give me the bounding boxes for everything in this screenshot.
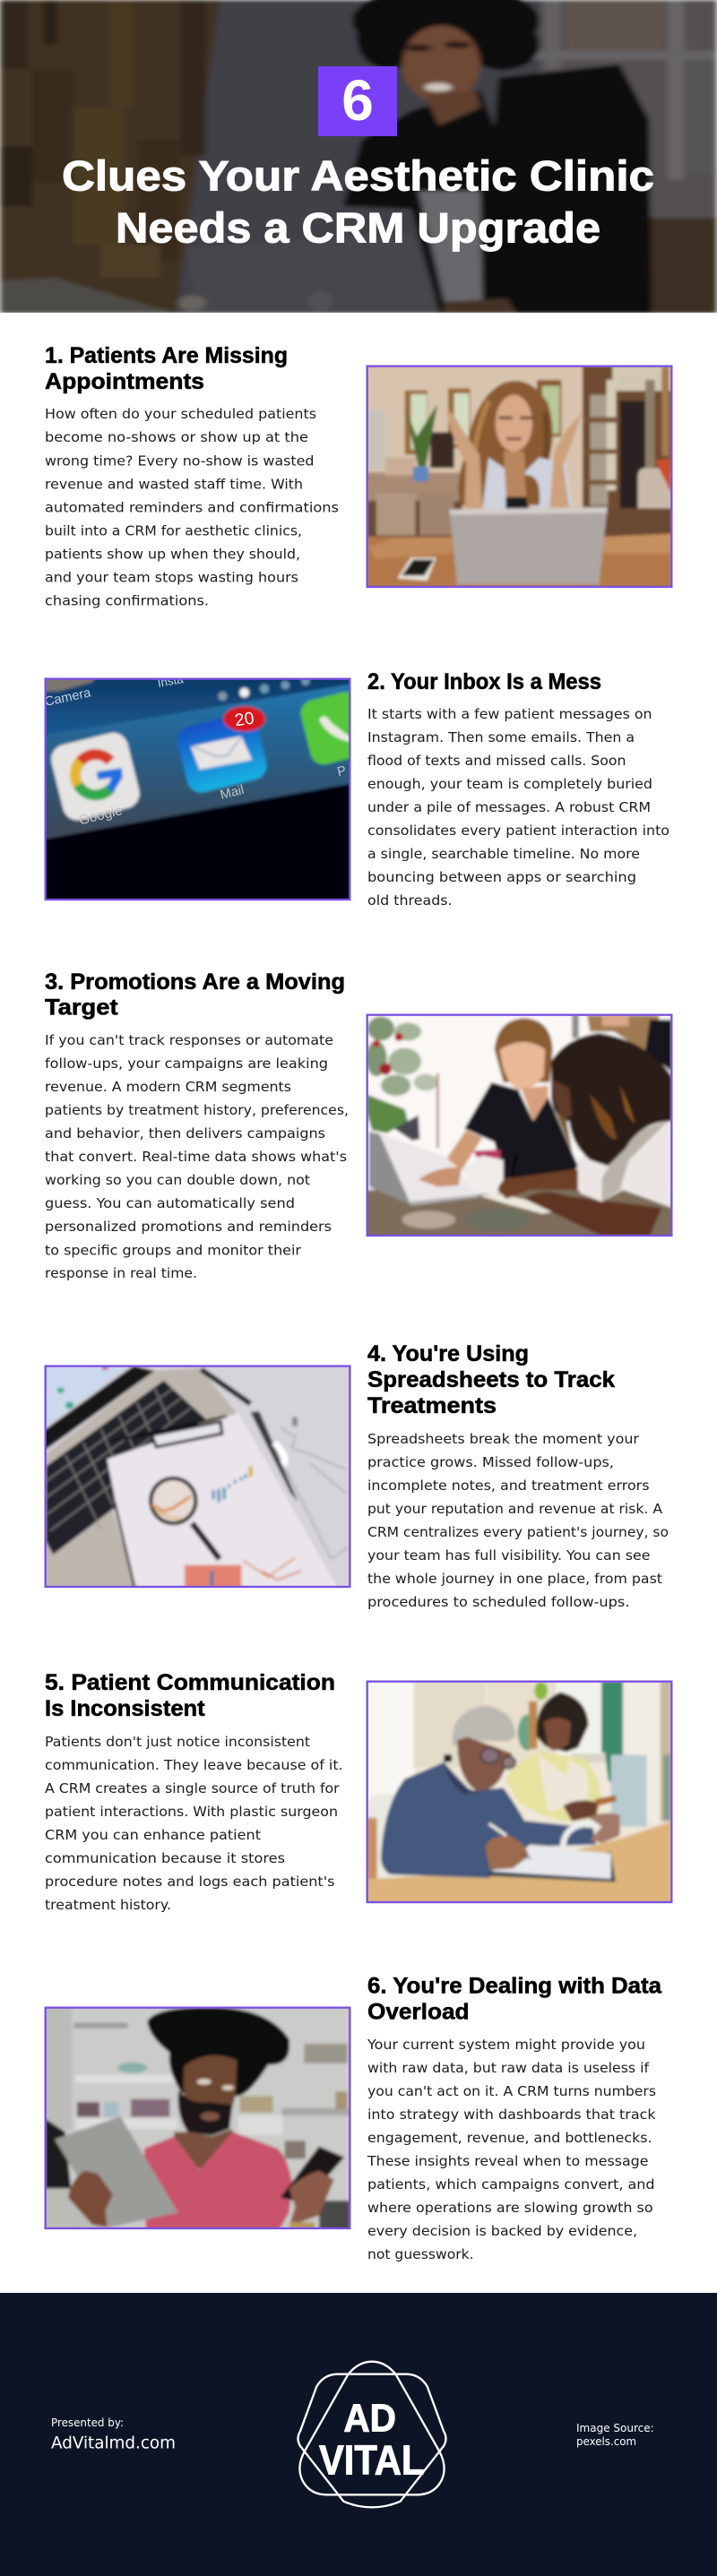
- text block: clue 6: every decision is backed by evidence,: [367, 2223, 637, 2239]
- text block: clue 2: Instagram. Then some emails. Then a: [367, 729, 635, 745]
- logo: AD VITAL: AD: [343, 2396, 396, 2440]
- presented by: AdVitalmd.com: [51, 2434, 176, 2453]
- text block: clue 2: It starts with a few patient messages on: [367, 706, 652, 722]
- text block: clue 5: procedure notes and logs each patient's: [45, 1874, 335, 1890]
- heading: clue 6: Overload: [367, 2000, 470, 2025]
- photo: older man signing paperwork with assistant: [363, 1677, 677, 1908]
- heading: clue 3: [45, 969, 345, 1020]
- text block: clue 2: under a pile of messages. A robust CRM: [367, 799, 651, 815]
- text block: clue 4: incomplete notes, and treatment errors: [367, 1478, 649, 1494]
- text block: clue 3: patients by treatment history, preferences,: [45, 1102, 349, 1118]
- text block: clue 2: bouncing between apps or searching: [367, 869, 636, 885]
- text block: clue 3: that convert. Real-time data shows what's: [45, 1149, 347, 1165]
- background photo: woman at laptop: [0, 0, 717, 314]
- photo: man juggling tablet and phone: [41, 2003, 355, 2234]
- text block: clue 5: treatment history.: [45, 1897, 171, 1913]
- text block: clue 3: [45, 1032, 349, 1281]
- text block: clue 1: How often do your scheduled patients: [45, 406, 316, 422]
- text block: clue 1: and your team stops wasting hours: [45, 570, 298, 586]
- text block: clue 5: [45, 1734, 343, 1913]
- text block: clue 4: [367, 1431, 669, 1610]
- heading: clue 4: Treatments: [367, 1393, 497, 1418]
- text block: clue 6: you can't act on it. A CRM turns numbers: [367, 2083, 656, 2099]
- title: [62, 152, 654, 251]
- text block: clue 1: become no-shows or show up at the: [45, 429, 308, 445]
- text block: clue 3: revenue. A modern CRM segments: [45, 1079, 291, 1095]
- photo: phone mail icon with notification badge: P: [336, 763, 348, 780]
- panel: clue 2: [41, 669, 669, 909]
- text block: clue 1: automated reminders and confirmations: [45, 500, 339, 516]
- text block: clue 3: guess. You can automatically send: [45, 1195, 295, 1211]
- text block: clue 3: to specific groups and monitor their: [45, 1242, 302, 1258]
- image source: [576, 2421, 654, 2448]
- text block: clue 5: Patients don't just notice inconsistent: [45, 1734, 310, 1750]
- number badge: 6: [341, 68, 374, 133]
- header banner: [0, 0, 717, 314]
- text block: clue 4: Spreadsheets break the moment your: [367, 1431, 640, 1447]
- heading: clue 5: Is Inconsistent: [45, 1696, 205, 1721]
- text block: clue 3: If you can't track responses or automate: [45, 1032, 333, 1048]
- photo: phone mail icon with notification badge: 20: [234, 710, 255, 730]
- heading: clue 2: 2. Your Inbox Is a Mess: [367, 669, 601, 694]
- photo: frustrated woman at laptop: [363, 362, 677, 592]
- photo: phone mail icon with notification badge: [45, 677, 351, 901]
- text block: clue 1: wrong time? Every no-show is wasted: [45, 453, 314, 470]
- text block: clue 5: A CRM creates a single source of truth for: [45, 1780, 340, 1796]
- text block: clue 3: follow-ups, your campaigns are leaking: [45, 1055, 328, 1072]
- text block: clue 3: personalized promotions and reminders: [45, 1219, 332, 1235]
- text block: clue 5: communication because it stores: [45, 1850, 285, 1866]
- heading: clue 3: Target: [45, 995, 118, 1020]
- text block: clue 4: put your reputation and revenue at risk. A: [367, 1501, 662, 1517]
- presented by: Presented by:: [51, 2416, 124, 2429]
- text block: clue 4: CRM centralizes every patient's journey, so: [367, 1524, 669, 1540]
- text block: clue 4: your team has full visibility. You can see: [367, 1547, 651, 1564]
- photo: phone mail icon with notification badge: Insta: [157, 672, 185, 690]
- heading: clue 1: Appointments: [45, 369, 204, 394]
- footer: [0, 2293, 717, 2576]
- text block: clue 5: CRM you can enhance patient: [45, 1827, 261, 1843]
- text block: clue 3: working so you can double down, not: [45, 1172, 310, 1188]
- text block: clue 1: [45, 406, 339, 609]
- text block: clue 1: chasing confirmations.: [45, 593, 209, 609]
- number badge: [318, 66, 397, 136]
- panel: clue 1: [45, 343, 677, 609]
- text block: clue 6: with raw data, but raw data is useless if: [367, 2060, 650, 2076]
- text block: clue 1: revenue and wasted staff time. With: [45, 477, 303, 493]
- text block: clue 6: where operations are slowing growth so: [367, 2200, 653, 2216]
- text block: clue 6: not guesswork.: [367, 2246, 474, 2262]
- logo: AD VITAL: VITAL: [319, 2437, 424, 2484]
- image source: pexels.com: [576, 2434, 636, 2448]
- panel: clue 5: [45, 1670, 677, 1913]
- photo: phone mail icon with notification badge: Google: [77, 803, 124, 829]
- text block: clue 6: engagement, revenue, and bottlenecks.: [367, 2130, 652, 2146]
- text block: clue 6: These insights reveal when to message: [367, 2153, 649, 2169]
- text block: clue 2: consolidates every patient interaction into: [367, 823, 669, 839]
- title: Clues Your Aesthetic Clinic: [62, 152, 654, 199]
- heading: clue 4: Spreadsheets to Track: [367, 1367, 615, 1392]
- title: Needs a CRM Upgrade: [116, 204, 600, 251]
- text block: clue 2: a single, searchable timeline. No more: [367, 846, 640, 862]
- text block: clue 4: procedures to scheduled follow-ups.: [367, 1594, 629, 1610]
- text block: clue 2: old threads.: [367, 892, 453, 909]
- text block: clue 4: the whole journey in one place, from past: [367, 1571, 662, 1587]
- text block: clue 5: communication. They leave because of it.: [45, 1757, 343, 1773]
- heading: clue 1: 1. Patients Are Missing: [45, 343, 288, 368]
- panel: clue 4: [41, 1341, 669, 1610]
- heading: clue 4: 4. You're Using: [367, 1341, 529, 1366]
- text block: clue 2: flood of texts and missed calls. Soon: [367, 753, 626, 769]
- logo: AD VITAL: [298, 2362, 445, 2507]
- heading: clue 4: [367, 1341, 615, 1418]
- panel: clue 6: [41, 1973, 662, 2262]
- photo: team working at laptop: [363, 1011, 677, 1241]
- heading: clue 6: 6. You're Dealing with Data: [367, 1973, 662, 1998]
- text block: clue 3: response in real time.: [45, 1265, 197, 1281]
- heading: clue 3: 3. Promotions Are a Moving: [45, 969, 345, 995]
- photo: phone mail icon with notification badge: Camera: [44, 685, 93, 710]
- photo: clipboard chart and magnifier beside laptop: [41, 1362, 355, 1592]
- text block: clue 6: into strategy with dashboards that track: [367, 2106, 656, 2123]
- text block: clue 1: built into a CRM for aesthetic clinics,: [45, 523, 302, 539]
- text block: clue 5: patient interactions. With plastic surgeon: [45, 1804, 338, 1820]
- text block: clue 6: Your current system might provide you: [367, 2037, 645, 2053]
- text block: clue 2: [367, 706, 669, 909]
- heading: clue 5: 5. Patient Communication: [45, 1670, 335, 1695]
- panel: clue 3: [45, 969, 677, 1281]
- presented by: [51, 2416, 176, 2453]
- heading: clue 6: [367, 1973, 662, 2025]
- heading: clue 1: [45, 343, 288, 394]
- heading: clue 5: [45, 1670, 335, 1721]
- photo: phone mail icon with notification badge: Mail: [219, 783, 246, 803]
- text block: clue 6: patients, which campaigns convert, and: [367, 2176, 655, 2193]
- text block: clue 4: practice grows. Missed follow-ups,: [367, 1454, 614, 1470]
- text block: clue 3: and behavior, then delivers campaigns: [45, 1125, 325, 1142]
- image source: Image Source:: [576, 2421, 654, 2434]
- text block: clue 1: patients show up when they should,: [45, 547, 300, 563]
- text block: clue 2: enough, your team is completely buried: [367, 776, 652, 792]
- text block: clue 6: [367, 2037, 656, 2262]
